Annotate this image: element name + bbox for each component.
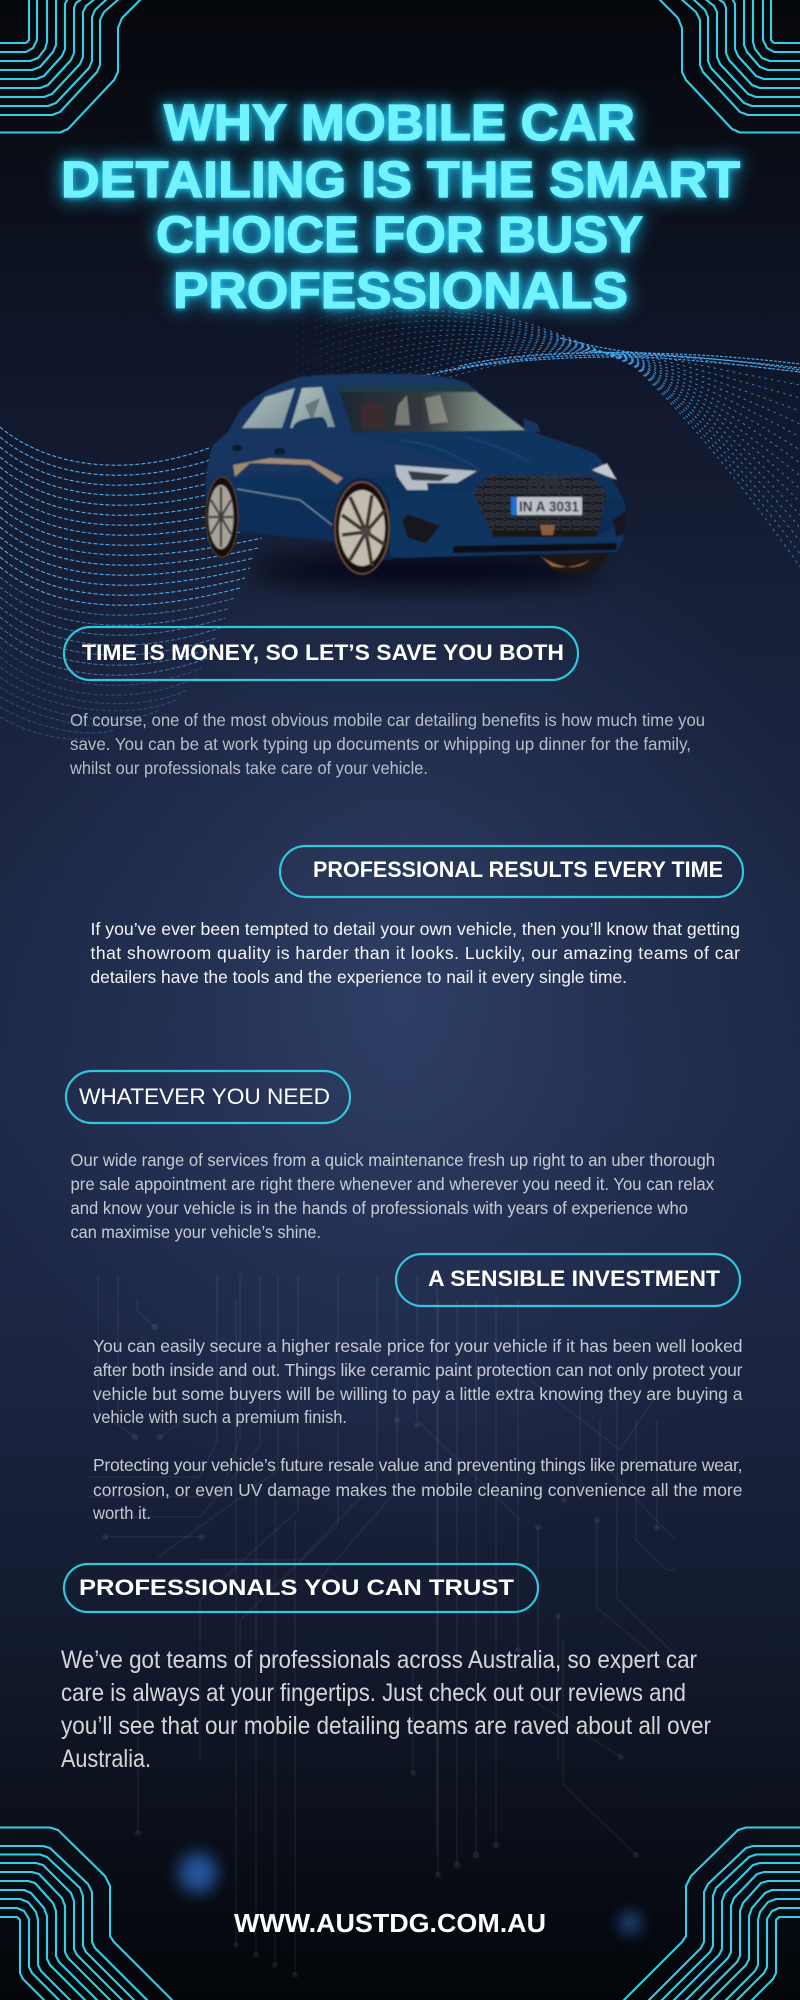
title: WHY MOBILE CAR [164,94,635,151]
section 4 body text: worth it. [92,1503,151,1523]
section 2 body text [90,919,740,987]
section 4 body text: vehicle with such a premium finish. [93,1407,347,1427]
section 5 body text: Australia. [61,1745,151,1773]
section 5 body text: We’ve got teams of professionals across Australia, so expert car [61,1646,697,1674]
front wheel [332,478,392,574]
car illustration [206,374,627,585]
section 5 body text: you’ll see that our mobile detailing teams are raved about all over [61,1712,711,1740]
hood highlight [353,432,600,475]
corner lines: bottom left [0,1828,175,2000]
glow: left blue spot [179,1853,217,1893]
section 3 heading pill [66,1071,350,1123]
headlight [395,465,477,490]
far front wheel [535,548,612,574]
car body [206,374,627,558]
section 5 heading pill [64,1564,538,1612]
far mirror [523,418,540,432]
section 3 body text: pre sale appointment are right there whenever and wherever you need it. You can relax [70,1174,714,1194]
section 1 heading pill: TIME IS MONEY, SO LET’S SAVE YOU BOTH [82,640,564,665]
licence plate: IN A 3031 [519,500,579,516]
right headlight [592,463,617,480]
section 2 heading pill [280,846,743,897]
lower door shading [232,490,333,540]
section 4 heading pill: A SENSIBLE INVESTMENT [428,1266,721,1291]
section 3 body text: and know your vehicle is in the hands of professionals with years of experience who [70,1198,688,1218]
rear wheel [206,477,238,557]
section 1 heading pill [64,627,578,680]
dotted wave: bright ridge [423,338,800,376]
dotted wave: right [290,305,800,567]
section 2 body text: that showroom quality is harder than it looks. Luckily, our amazing teams of car [90,943,740,963]
section 1 body text: Of course, one of the most obvious mobile car detailing benefits is how much time you [70,710,705,730]
door handles [232,445,242,451]
title: DETAILING IS THE SMART [61,151,740,208]
dotted wave: left [0,427,262,739]
website url: WWW.AUSTDG.COM.AU [234,1908,546,1938]
title: CHOICE FOR BUSY [156,206,643,263]
lower splitter [453,543,617,553]
rear side glass [242,388,295,428]
corner lines: top right [658,0,800,132]
background: circuit traces [87,1275,675,1978]
section 1 body text [69,710,705,778]
section 2 body text: If you’ve ever been tempted to detail your own vehicle, then you’ll know that getting [90,919,740,939]
title [61,94,740,319]
section 5 body text [61,1646,711,1773]
section 4 body text: corrosion, or even UV damage makes the mobile cleaning convenience all the more [93,1480,742,1500]
logo rings [529,478,565,490]
section 3 heading pill: WHATEVER YOU NEED [79,1084,330,1109]
corner lines: top left [0,0,142,132]
section 3 body text: can maximise your vehicle’s shine. [70,1222,321,1242]
windshield [337,385,525,432]
section 4 body text: You can easily secure a higher resale price for your vehicle if it has been well looked [93,1336,742,1356]
section 5 heading pill: PROFESSIONALS YOU CAN TRUST [79,1575,515,1600]
section 2 heading pill: PROFESSIONAL RESULTS EVERY TIME [313,857,723,882]
section 1 body text: save. You can be at work typing up documents or whipping up dinner for the family, [70,734,691,754]
front foglamp [402,514,440,543]
section 1 body text: whilst our professionals take care of your vehicle. [69,758,428,778]
section 4 body text: after both inside and out. Things like ceramic paint protection can not only protect your [93,1360,743,1380]
section 4 body text: Protecting your vehicle’s future resale value and preventing things like premature wear, [93,1455,742,1475]
section 4 heading pill [396,1254,740,1306]
mirror [293,417,328,434]
right foglamp [613,510,627,537]
glow: right blue spot [621,1913,639,1933]
front side glass [290,387,335,428]
section 5 body text: care is always at your fingertips. Just check out our reviews and [61,1679,686,1707]
section 4 body text: vehicle but some buyers will be willing to pay a little extra knowing they are buying a [93,1384,743,1404]
section 4 body text [92,1336,743,1523]
front bumper [390,490,623,558]
section 3 body text [70,1150,715,1242]
corner lines: bottom right [621,1828,800,2000]
section 3 body text: Our wide range of services from a quick maintenance fresh up right to an uber thorough [70,1150,715,1170]
car shadow [250,555,600,585]
grille [473,475,607,537]
title: PROFESSIONALS [173,262,628,319]
section 2 body text: detailers have the tools and the experience to nail it every single time. [90,967,627,987]
door reflection [233,458,343,484]
